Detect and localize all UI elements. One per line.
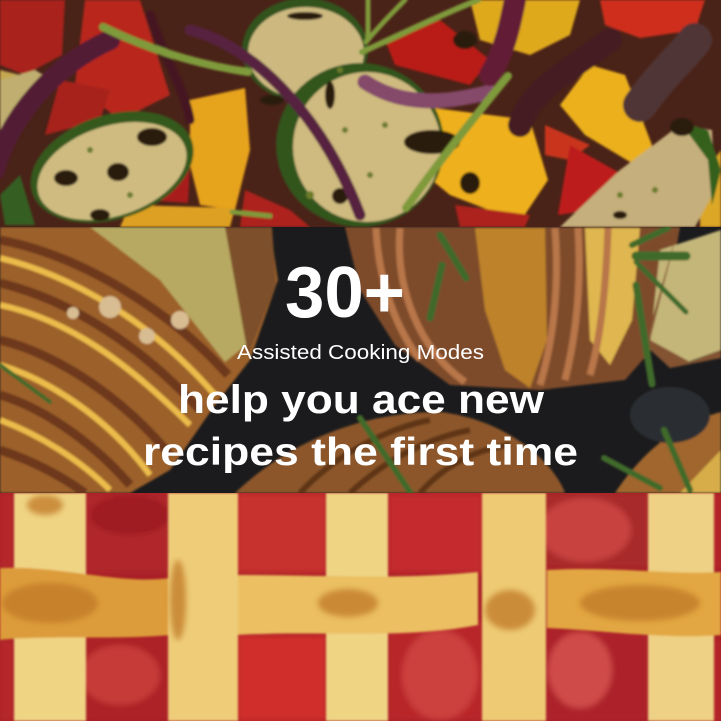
bottom potatoes — [235, 412, 721, 493]
grill char marks — [54, 12, 694, 221]
red onion strips — [0, 0, 695, 215]
dark stone highlights — [630, 387, 710, 443]
right potato — [345, 227, 721, 390]
headline line 1: help you ace new — [178, 378, 545, 422]
big number: 30+ — [285, 253, 405, 333]
subtitle: Assisted Cooking Modes — [237, 342, 484, 364]
herb flecks — [87, 67, 658, 199]
pastry lattice — [0, 493, 721, 721]
panel: roasted vegetables photo — [0, 0, 721, 242]
strawberry filling — [0, 493, 721, 721]
browned pastry spots — [2, 495, 700, 640]
zucchini slices — [0, 0, 721, 242]
rosemary sprigs — [0, 228, 690, 492]
red and yellow peppers — [0, 0, 721, 227]
butter highlights — [67, 296, 189, 344]
headline line 2: recipes the first time — [143, 431, 578, 474]
panel: strawberry lattice pie photo — [0, 493, 721, 721]
headline text — [143, 253, 578, 474]
left potato — [0, 227, 278, 493]
panel: hasselback potatoes photo — [0, 227, 721, 493]
rosemary sprigs — [103, 0, 508, 216]
